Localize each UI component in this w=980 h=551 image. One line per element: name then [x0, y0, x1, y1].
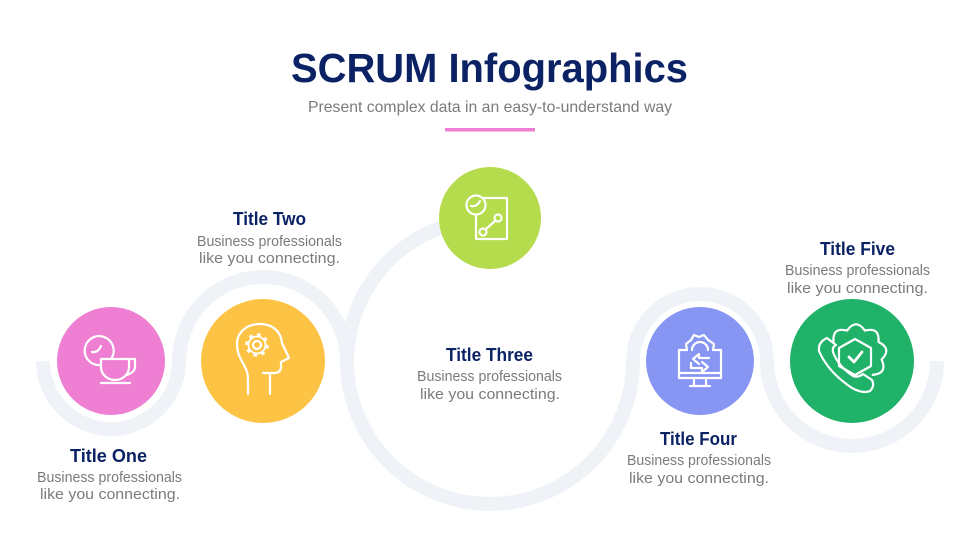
text: title one: like you connecting. — [40, 486, 180, 503]
text: title two: Business professionals — [197, 233, 342, 250]
text: title one: Business professionals — [37, 469, 182, 486]
title: SCRUM Infographics — [291, 45, 688, 91]
text: title three: Business professionals — [417, 368, 562, 385]
panel: title one — [37, 307, 182, 503]
panel: title four — [627, 307, 771, 487]
accent underline — [445, 128, 535, 132]
icon: head with gear — [237, 324, 289, 394]
circle: lime — [439, 167, 541, 269]
text: title five: like you connecting. — [787, 280, 928, 297]
text: title three: Title Three — [446, 345, 533, 365]
circle: green — [790, 299, 914, 423]
panel: title three — [417, 167, 562, 403]
text: title two: Title Two — [233, 209, 306, 229]
text: title three — [417, 345, 562, 403]
text: title one — [37, 446, 182, 503]
circle: periwinkle — [646, 307, 754, 415]
text: title four: Title Four — [660, 429, 737, 449]
icon: coffee cup and clock — [85, 336, 135, 383]
icon: phone, gear and shield — [819, 324, 886, 392]
curved track — [43, 226, 937, 504]
panel: title two — [197, 209, 342, 423]
text: title four: Business professionals — [627, 452, 771, 469]
text: title four — [627, 429, 771, 487]
icon: clock and chart sheet — [466, 196, 507, 239]
text: title five: Business professionals — [785, 262, 930, 279]
text: title one: Title One — [70, 446, 147, 466]
circle: pink — [57, 307, 165, 415]
text: title five — [785, 239, 930, 297]
text: title five: Title Five — [820, 239, 895, 259]
text: title three: like you connecting. — [420, 386, 560, 403]
icon: monitor with gear — [679, 335, 721, 386]
circle: yellow — [201, 299, 325, 423]
panel: title five — [785, 239, 930, 423]
text: title four: like you connecting. — [629, 470, 769, 487]
text: title two — [197, 209, 342, 267]
text: title two: like you connecting. — [199, 250, 340, 267]
subtitle: Present complex data in an easy-to-understand way — [308, 99, 672, 116]
